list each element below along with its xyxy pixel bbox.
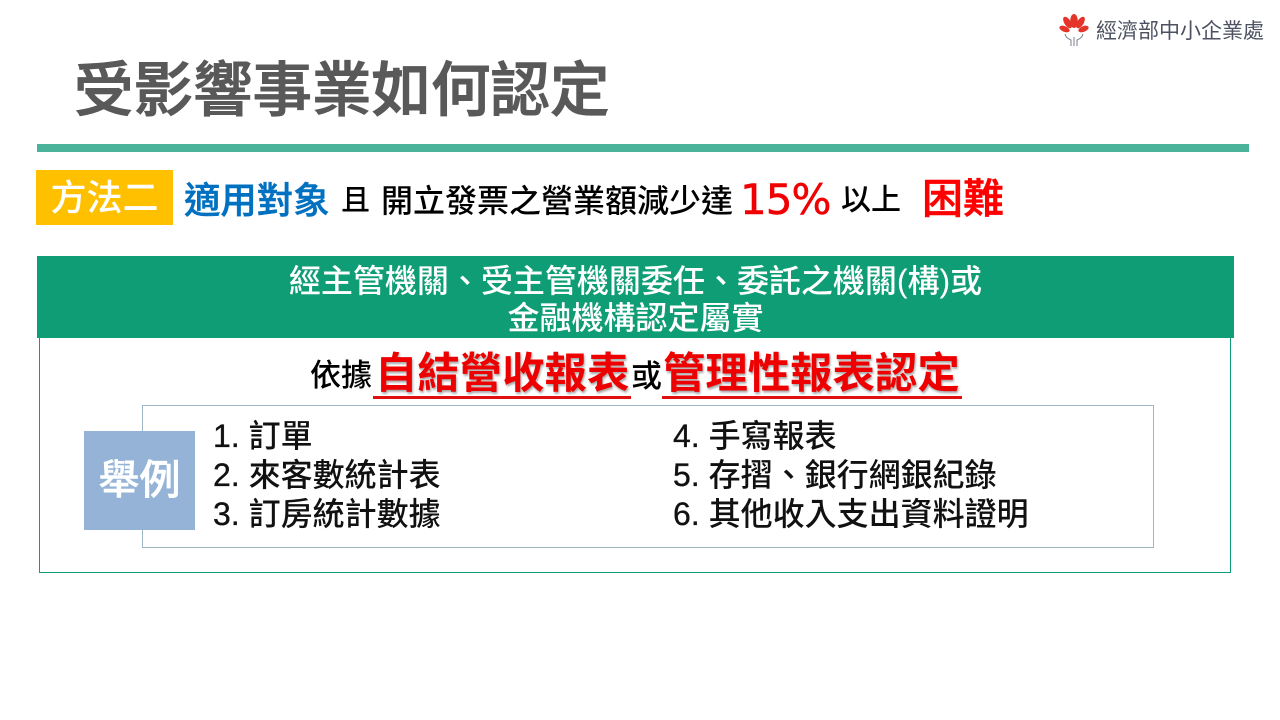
examples label — [84, 431, 195, 530]
title: 受影響事業如何認定 — [74, 57, 610, 124]
examples label: 舉例 — [98, 457, 180, 503]
list column 2: 4. 手寫報表 — [673, 418, 837, 454]
and: 且 — [341, 185, 370, 217]
applicable target: 適用對象 — [184, 180, 330, 221]
list column 1 — [213, 418, 441, 532]
outlined panel — [39, 337, 1231, 573]
15 percent: 15% — [740, 175, 830, 224]
icon: red flower and hands — [1059, 14, 1089, 46]
basis text: 依據 — [310, 358, 372, 393]
red emphasis 1: 自結營收報表 — [375, 350, 629, 397]
method badge — [36, 170, 173, 225]
list column 1: 3. 訂房統計數據 — [213, 496, 441, 532]
list column 2: 6. 其他收入支出資料證明 — [673, 496, 1029, 532]
examples box — [142, 405, 1154, 548]
logo text: 經濟部中小企業處 — [1096, 20, 1264, 43]
criteria line — [184, 175, 1004, 224]
or more: 以上 — [841, 184, 901, 217]
green header — [37, 256, 1234, 338]
header line 1: 經主管機關、受主管機關委任、委託之機關(構)或 — [289, 263, 982, 299]
list column 1: 1. 訂單 — [213, 418, 313, 454]
list column 2 — [673, 418, 1029, 532]
difficulty: 困難 — [922, 176, 1004, 222]
list column 1: 2. 來客數統計表 — [213, 457, 441, 493]
method badge: 方法二 — [50, 177, 158, 218]
revenue reduction text: 開立發票之營業額減少達 — [381, 183, 733, 219]
red emphasis 2: 管理性報表認定 — [663, 350, 960, 397]
logo: 經濟部中小企業處 — [1059, 14, 1264, 46]
or: 或 — [631, 359, 662, 394]
list column 2: 5. 存摺、銀行網銀紀錄 — [673, 457, 997, 493]
header line 2: 金融機構認定屬實 — [507, 300, 764, 336]
title rule — [37, 144, 1249, 152]
